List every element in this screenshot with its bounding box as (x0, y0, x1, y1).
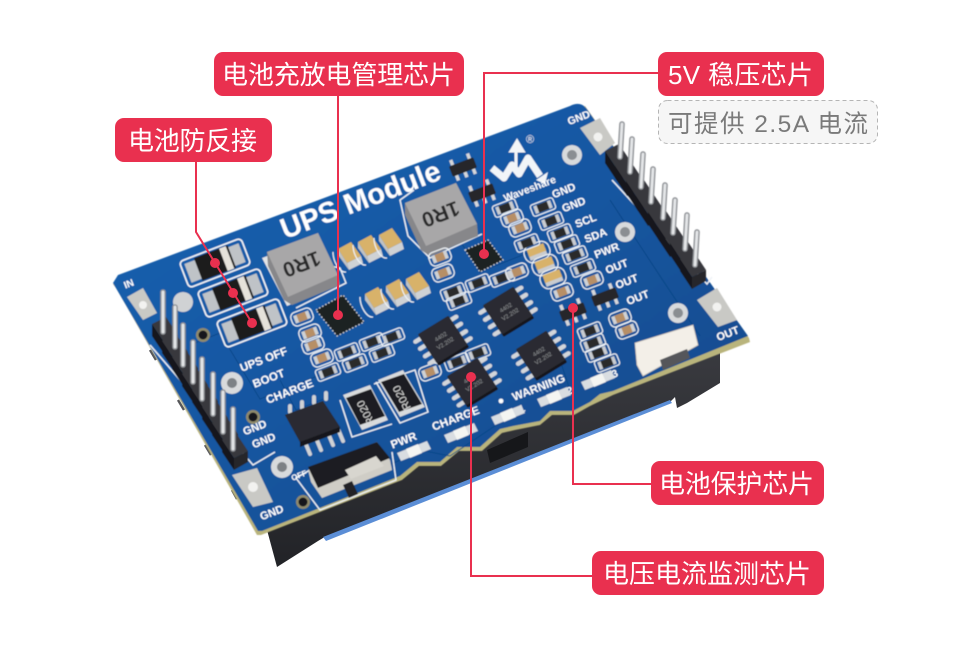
leader line: current monitor (466, 372, 592, 576)
QFN chip charge manager (316, 295, 364, 336)
SOIC chip bottom left (285, 393, 343, 454)
function labels left: OFF (290, 469, 308, 483)
corner labels (122, 108, 741, 523)
QFN chip 5V regulator (465, 240, 503, 272)
leader line: reverse protection (196, 162, 257, 328)
leader line: battery protection (568, 303, 651, 484)
right pin header (605, 124, 706, 289)
corner pads (127, 118, 737, 507)
SOT chips (447, 152, 621, 327)
protection diodes (179, 238, 288, 348)
SOIC chip right: V2.202 (534, 351, 554, 367)
indicator labels (389, 367, 620, 452)
corner labels: OUT (715, 324, 741, 344)
function labels left: BOOT (251, 368, 287, 391)
inductor left (262, 233, 340, 306)
mounting holes (139, 132, 722, 509)
callout: 5V regulator: 5V 稳压芯片 (668, 60, 813, 90)
pin labels right: GND (560, 195, 588, 215)
pin labels right: SDA (583, 226, 609, 246)
sense resistor left (343, 385, 388, 430)
indicator LEDs (397, 370, 615, 461)
inductor right (405, 183, 478, 256)
function labels left: GND (250, 431, 278, 451)
indicator labels: 1 (517, 402, 527, 416)
waveshare logo (492, 134, 558, 205)
corner labels: GND (258, 503, 286, 523)
SOIC chip upper left: V2.202 (436, 336, 456, 352)
leader line: charge manager (333, 96, 343, 320)
indicator labels: CHARGE (431, 405, 482, 434)
pin labels right: OUT (604, 257, 630, 277)
waveshare logo: ® (526, 134, 534, 146)
silk outlines (150, 180, 712, 510)
function labels left: UPS OFF (239, 346, 289, 375)
indicator labels: 3 (610, 367, 620, 381)
board title: UPS Module (276, 155, 445, 246)
callout: current monitor (592, 551, 824, 595)
callout: battery protection (651, 461, 824, 505)
corner labels: GND (566, 108, 592, 128)
note: 2.5A (658, 100, 878, 144)
note: 2.5A: 可提供 2.5A 电流 (668, 110, 868, 138)
pin labels right: GND (550, 181, 578, 201)
SOIC chip top (478, 284, 539, 340)
SOIC chip current monitor: V2.202 (465, 378, 485, 394)
SOIC chip current monitor (442, 355, 503, 411)
function labels left: GND (241, 418, 269, 438)
PCB board (113, 104, 750, 535)
white connector (635, 325, 698, 376)
callout: current monitor: 电压电流监测芯片 (603, 559, 811, 589)
SOIC chip right (511, 328, 572, 384)
leader line: 5V regulator (479, 73, 658, 259)
indicator labels: PWR (389, 431, 419, 452)
sense resistor right (378, 370, 425, 417)
SOIC chip current monitor: 4402 (463, 373, 478, 385)
callout: 5V regulator (658, 52, 824, 96)
inductor right: 1R0 (418, 196, 463, 231)
function labels left (239, 346, 316, 483)
sense resistor left: R020 (355, 398, 378, 427)
small resistors and capacitors (289, 197, 640, 382)
indicator labels: WARNING (511, 373, 567, 404)
corner labels: IN (122, 278, 136, 292)
pin labels right: OUT (625, 288, 651, 308)
callout: charge manager: 电池充放电管理芯片 (222, 60, 455, 90)
indicator labels: 2 (565, 384, 575, 398)
sense resistor right: R020 (391, 383, 414, 412)
SOIC chip upper left: 4402 (434, 331, 449, 343)
left pin header (152, 292, 248, 470)
battery holder (150, 345, 720, 567)
pin labels right: PWR (593, 241, 621, 261)
SOIC chip upper left (413, 313, 474, 369)
pin labels right (550, 181, 651, 308)
waveshare logo: Waveshare (502, 174, 558, 205)
pin labels right: SCL (574, 212, 599, 231)
capacitors (333, 228, 568, 317)
SOIC chip right: 4402 (532, 346, 547, 358)
pin labels right: OUT (614, 272, 640, 292)
callout: charge manager (214, 52, 464, 96)
slide switch (308, 442, 392, 498)
board surface (113, 104, 748, 531)
callout: battery protection: 电池保护芯片 (659, 469, 814, 499)
inductor left: 1R0 (279, 246, 324, 281)
callout: reverse protection: 电池防反接 (128, 126, 257, 156)
board traces (190, 200, 700, 470)
board edge (113, 106, 750, 535)
SOIC chip top: V2.202 (501, 307, 521, 323)
function labels left: CHARGE (265, 378, 316, 407)
callout: reverse protection (115, 118, 272, 162)
SOIC chip top: 4402 (499, 302, 514, 314)
